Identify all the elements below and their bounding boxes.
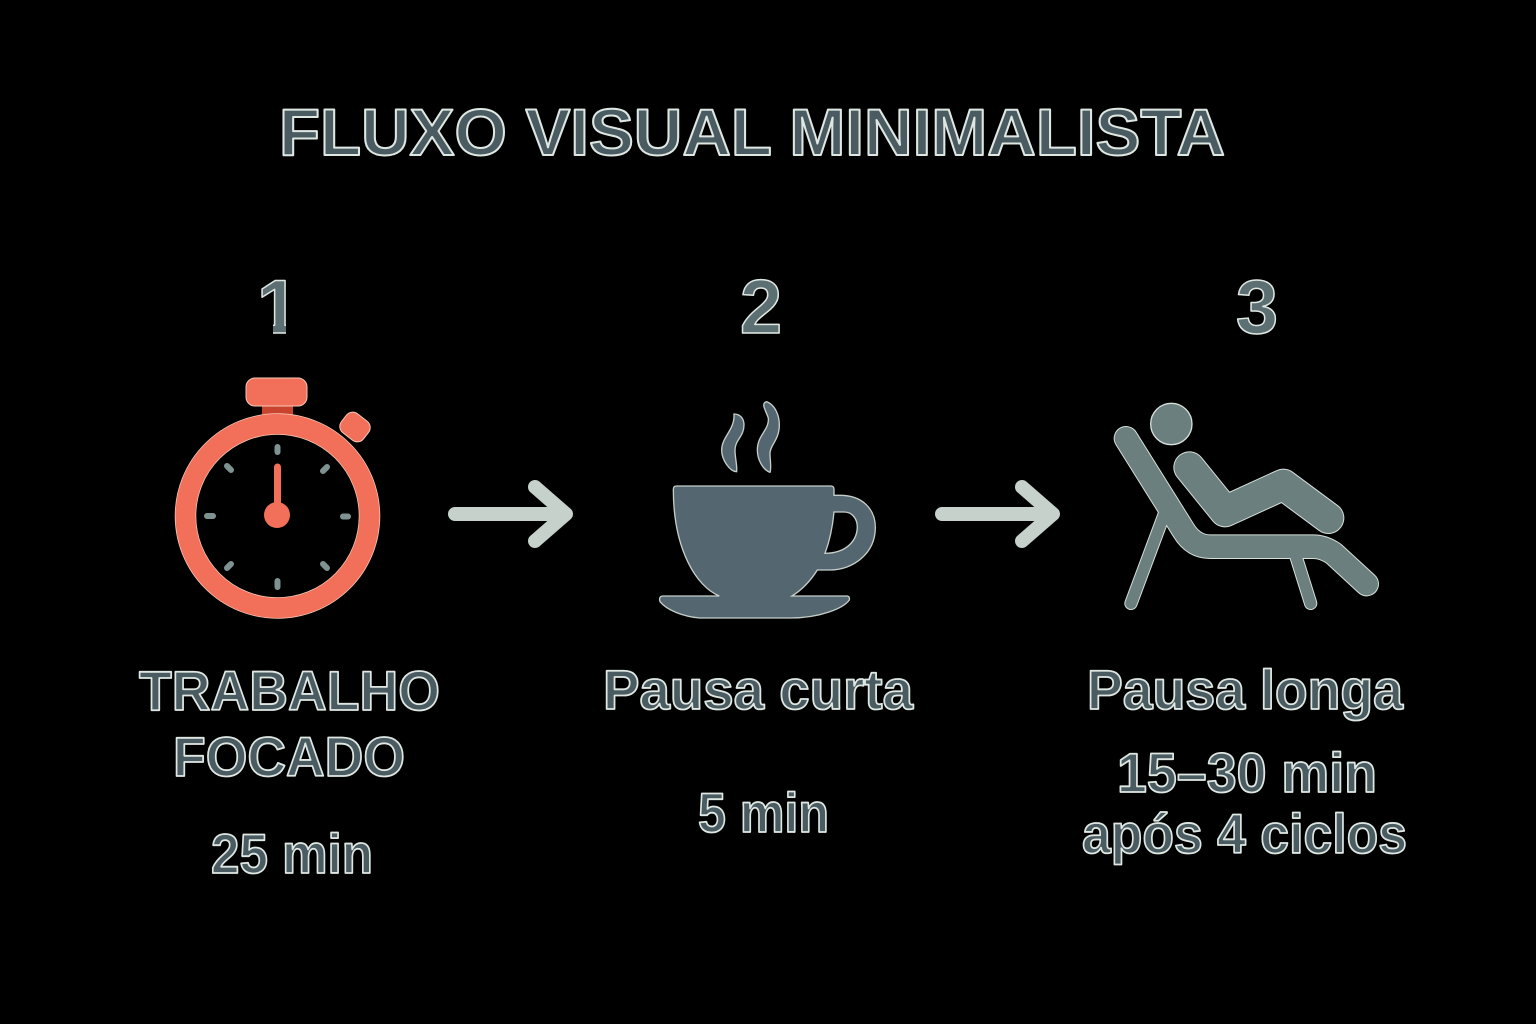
label: trabalho: TRABALHO [139,659,440,722]
step number 1: 1 [257,265,299,350]
icon: stopwatch [186,378,373,608]
step number 3: 3 [1236,265,1278,350]
arrow: step 2 to 3 [942,487,1053,541]
step number 2: 2 [740,265,782,350]
icon: person reclining on lounge chair [1126,403,1367,603]
duration: 5 min: 5 min [698,781,829,844]
label: pausa curta: Pausa curta [603,658,914,721]
panel: step 3 long break [1082,265,1407,865]
title: FLUXO VISUAL MINIMALISTA [279,95,1225,169]
panel: step 1 work [139,265,440,885]
label line: focado: FOCADO [173,725,405,788]
icon: coffee cup [660,402,875,618]
label: pausa longa: Pausa longa [1087,658,1404,721]
duration: 15-30 min: 15–30 min [1117,741,1377,804]
arrow: step 1 to 2 [455,487,566,541]
duration: 25 min: 25 min [211,822,373,885]
note: after 4 cycles: após 4 ciclos [1082,802,1407,865]
panel: step 2 short break [603,265,914,844]
